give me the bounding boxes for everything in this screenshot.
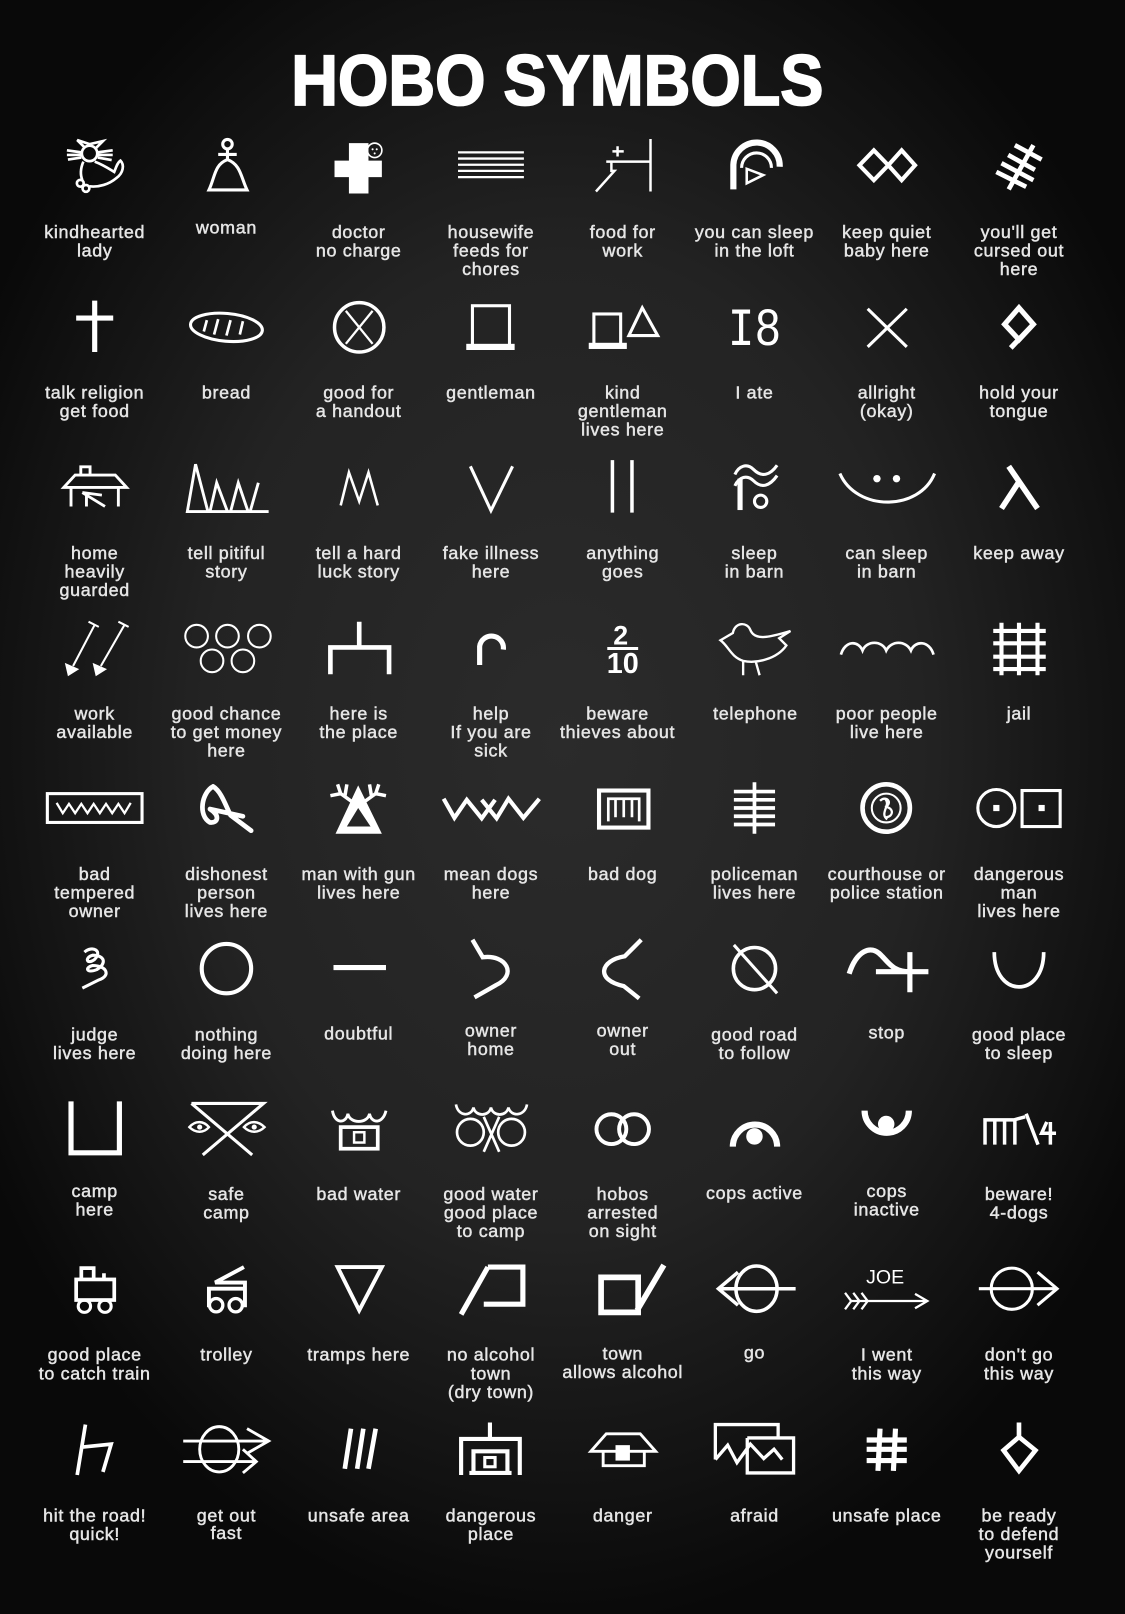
- label: If you are: [450, 722, 532, 742]
- icon: circle with arrows: [183, 1427, 269, 1473]
- label: available: [56, 722, 133, 742]
- label: I went: [861, 1345, 913, 1365]
- icon: cat: [67, 140, 123, 192]
- label: bread: [202, 382, 251, 402]
- label: fake illness: [443, 543, 539, 563]
- icon: shovels: [65, 622, 129, 676]
- label: yourself: [985, 1542, 1053, 1562]
- label: here: [207, 741, 246, 761]
- symbol: bad dog: [588, 791, 657, 884]
- icon: crossed lines with eyes: [189, 1103, 265, 1155]
- symbol: cursed out here: [974, 145, 1064, 279]
- icon: loaf: [189, 310, 264, 344]
- label: woman: [195, 218, 257, 238]
- symbol: poor people live here: [836, 643, 938, 742]
- symbol: no alcohol town dry town: [447, 1267, 535, 1402]
- label: unsafe place: [832, 1505, 941, 1525]
- icon: jagged line: [444, 799, 539, 818]
- label: owner: [597, 1021, 649, 1041]
- icon: train: [76, 1268, 114, 1312]
- symbol: owner home: [465, 940, 517, 1059]
- label: allows alcohol: [562, 1362, 683, 1382]
- label: camp: [71, 1181, 118, 1201]
- label: feeds for: [453, 240, 529, 260]
- label: bad dog: [588, 864, 657, 884]
- label: dangerous: [446, 1505, 536, 1525]
- label: good for: [323, 382, 394, 402]
- symbol: kind gentleman lives here: [578, 308, 668, 439]
- symbol: camp here: [71, 1101, 119, 1220]
- symbol: talk religion get food: [45, 301, 144, 421]
- label: lives here: [53, 1043, 136, 1063]
- symbol: dangerous man lives here: [974, 790, 1064, 921]
- label: this way: [984, 1363, 1054, 1383]
- icon: two lines: [612, 460, 632, 513]
- label: cursed out: [974, 240, 1064, 260]
- label: to defend: [979, 1524, 1059, 1544]
- icon: meander in box: [599, 791, 648, 828]
- label: don't go: [985, 1345, 1053, 1365]
- label: dishonest: [185, 864, 268, 884]
- label: a handout: [316, 401, 402, 421]
- label: good road: [711, 1025, 798, 1045]
- label: keep quiet: [842, 222, 931, 242]
- label: owner: [465, 1021, 517, 1041]
- label: anything: [586, 543, 659, 563]
- symbol: owner out: [597, 940, 649, 1059]
- label: sick: [474, 741, 508, 761]
- label: person: [197, 883, 256, 903]
- label: food for: [590, 222, 656, 242]
- label: out: [609, 1039, 636, 1059]
- icon: cross and circle: [335, 143, 382, 194]
- label: beware: [586, 704, 649, 724]
- icon: hat and triangle: [589, 308, 658, 349]
- label: you'll get: [981, 222, 1057, 242]
- label: in barn: [725, 561, 784, 581]
- symbol: doctor no charge: [316, 143, 402, 260]
- icon: pole with bars: [734, 782, 775, 834]
- icon: hash: [867, 1429, 907, 1471]
- label: doing here: [181, 1043, 272, 1063]
- label: to camp: [457, 1221, 525, 1241]
- label: in barn: [857, 561, 916, 581]
- symbol: beware 4-dogs: [985, 1114, 1056, 1223]
- label: stop: [868, 1023, 905, 1043]
- label: good place: [48, 1345, 142, 1365]
- label: man: [1001, 883, 1037, 903]
- label: hit the road!: [43, 1505, 146, 1525]
- label: tongue: [990, 401, 1048, 421]
- icon: crown and box: [332, 1111, 386, 1149]
- symbol: good place to catch train: [39, 1268, 151, 1383]
- symbol: hobos arrested on sight: [587, 1114, 658, 1241]
- label: camp: [203, 1203, 250, 1223]
- icon: slashed circle: [733, 945, 777, 993]
- label: luck story: [318, 561, 400, 581]
- label: lives here: [713, 883, 796, 903]
- symbol: be ready to defend yourself: [979, 1423, 1059, 1562]
- icon: diamond with tail: [1005, 308, 1033, 348]
- icon: arches with triangle: [733, 143, 780, 189]
- label: talk religion: [45, 382, 144, 402]
- symbol: bad water: [316, 1111, 401, 1204]
- symbol: trolley: [200, 1267, 253, 1365]
- label: lives here: [977, 901, 1061, 921]
- symbol: here is the place: [319, 622, 398, 742]
- label: you can sleep: [695, 222, 814, 242]
- label: 4-dogs: [990, 1203, 1048, 1223]
- label: work: [601, 240, 643, 260]
- symbol: anything goes: [586, 460, 659, 581]
- symbol: I ate: [728, 301, 781, 402]
- label: sleep: [731, 543, 778, 563]
- label: here: [472, 561, 510, 581]
- label: help: [473, 704, 509, 724]
- label: allright: [858, 382, 916, 402]
- symbol: stop: [849, 950, 928, 1043]
- icon: U square: [71, 1101, 119, 1153]
- label: cops active: [706, 1183, 803, 1203]
- label: owner: [69, 901, 121, 921]
- label: nothing: [195, 1025, 258, 1045]
- label: arrested: [587, 1203, 658, 1223]
- symbol: don't go this way: [979, 1268, 1057, 1383]
- symbol: work available: [56, 622, 133, 742]
- label: go: [744, 1343, 765, 1363]
- symbol: safe camp: [189, 1103, 265, 1223]
- label: kind: [605, 382, 640, 402]
- symbol: woman: [195, 139, 257, 238]
- label: (dry town): [448, 1382, 534, 1402]
- label: jail: [1006, 704, 1031, 724]
- icon: zigzag in box: [47, 794, 142, 822]
- label: to follow: [719, 1043, 790, 1063]
- symbol: unsafe place: [832, 1429, 941, 1525]
- label: be ready: [981, 1505, 1056, 1525]
- label: doubtful: [324, 1024, 393, 1044]
- symbol: mean dogs here: [444, 799, 539, 903]
- symbol: kindhearted lady: [44, 140, 145, 260]
- label: courthouse or: [828, 864, 946, 884]
- icon: slanted ladder: [996, 145, 1042, 189]
- icon: row of triangles: [186, 464, 269, 512]
- icon: square and slash: [601, 1265, 664, 1312]
- symbol: courthouse or police station: [828, 784, 946, 903]
- symbol: jail: [993, 623, 1046, 724]
- label: in the loft: [714, 240, 794, 260]
- icon: post and legs: [330, 622, 389, 674]
- icon: curve left: [604, 940, 641, 998]
- symbol: judge lives here: [53, 949, 136, 1063]
- label: good water: [443, 1184, 539, 1204]
- symbol: fake illness here: [443, 466, 539, 581]
- symbol: tell pitiful story: [186, 464, 269, 581]
- label: live here: [850, 722, 924, 742]
- label: to get money: [171, 722, 282, 742]
- icon: dash: [333, 965, 386, 970]
- icon: circle and square: [978, 790, 1060, 827]
- label: no charge: [316, 240, 402, 260]
- label: policeman: [711, 864, 798, 884]
- label: here is: [330, 704, 388, 724]
- label: quick!: [69, 1524, 120, 1544]
- icon: U curve: [994, 952, 1044, 987]
- symbol: policeman lives here: [711, 782, 798, 903]
- label: I ate: [735, 382, 774, 402]
- symbol: gentleman: [446, 306, 536, 402]
- icon: hook: [480, 636, 503, 665]
- label: keep away: [973, 543, 1065, 563]
- symbol: good road to follow: [711, 945, 798, 1063]
- icon: bowl and dot: [865, 1111, 909, 1133]
- icon: waves and circle: [735, 465, 777, 510]
- label: tell pitiful: [188, 543, 265, 563]
- symbol: good water good place to camp: [443, 1104, 539, 1241]
- symbol: go: [718, 1266, 796, 1363]
- label: baby here: [844, 240, 930, 260]
- icon: two over ten: 2: [613, 620, 628, 650]
- symbol: keep quiet baby here: [842, 150, 931, 260]
- icon: X: [868, 309, 907, 347]
- label: cops: [866, 1181, 907, 1201]
- label: good chance: [172, 704, 281, 724]
- label: dangerous: [974, 864, 1064, 884]
- label: here: [1000, 259, 1038, 279]
- label: beware!: [985, 1184, 1053, 1204]
- symbol: man with gun lives here: [301, 784, 416, 903]
- label: here: [75, 1200, 114, 1220]
- label: thieves about: [560, 722, 675, 742]
- symbol: bread: [189, 310, 264, 402]
- label: gentleman: [578, 401, 668, 421]
- label: work: [73, 704, 115, 724]
- icon: table and post: [596, 139, 651, 191]
- icon: squiggle: [82, 949, 106, 988]
- label: the place: [319, 722, 398, 742]
- icon: wavy line: [841, 643, 934, 655]
- label: trolley: [200, 1345, 253, 1365]
- label: lady: [77, 240, 112, 260]
- label: kindhearted: [44, 222, 145, 242]
- symbol: housewife feeds for chores: [448, 152, 534, 279]
- label: doctor: [332, 222, 386, 242]
- icon: I8: I8: [728, 301, 781, 362]
- label: gentleman: [446, 382, 536, 402]
- label: fast: [211, 1523, 242, 1543]
- label: safe: [208, 1184, 245, 1204]
- symbol: doubtful: [324, 968, 393, 1044]
- icon: smile: [840, 474, 935, 502]
- symbol: you can sleep in the loft: [695, 143, 814, 260]
- label: man with gun: [301, 864, 416, 884]
- label: home: [467, 1039, 515, 1059]
- symbol: good place to sleep: [972, 952, 1066, 1063]
- symbol: unsafe area: [308, 1429, 410, 1525]
- label: town: [471, 1363, 511, 1383]
- icon: lambda: [1001, 466, 1038, 509]
- label: hobos: [597, 1184, 649, 1204]
- label: bad: [79, 864, 111, 884]
- label: judge: [70, 1025, 118, 1045]
- icon: small house: [591, 1434, 656, 1466]
- icon: slash and square: [461, 1267, 523, 1314]
- icon: top hat: [466, 306, 515, 350]
- icon: house with inner box: [461, 1423, 520, 1475]
- label: good place: [444, 1203, 538, 1223]
- label: get food: [60, 401, 130, 421]
- symbol: help if you are sick: [450, 636, 532, 761]
- icon: M: [341, 472, 378, 505]
- icon: grid: [993, 623, 1046, 675]
- icon: woman: [209, 139, 247, 190]
- label: to sleep: [985, 1043, 1053, 1063]
- icon: inverted triangle: [338, 1267, 382, 1310]
- label: telephone: [713, 704, 798, 724]
- icon: three slashes: [345, 1429, 376, 1469]
- icon: arch and dot: [733, 1125, 777, 1147]
- symbol: bad tempered owner: [47, 794, 142, 921]
- label: here: [472, 883, 510, 903]
- label: to catch train: [39, 1363, 151, 1383]
- label: town: [602, 1344, 643, 1364]
- icon: overlapping boxes: [715, 1425, 794, 1473]
- label: housewife: [448, 222, 534, 242]
- icon: V: [470, 466, 513, 511]
- icon: five lines: [458, 152, 524, 177]
- label: tell a hard: [316, 543, 402, 563]
- label: lives here: [581, 419, 664, 439]
- icon: five circles: [185, 625, 271, 672]
- symbol: dangerous place: [446, 1423, 536, 1544]
- icon: two over ten: 10: [607, 648, 639, 680]
- symbol: hit the road quick: [43, 1425, 146, 1544]
- label: inactive: [854, 1200, 920, 1220]
- symbol: cops active: [706, 1125, 803, 1203]
- label: no alcohol: [447, 1345, 535, 1365]
- label: lives here: [317, 883, 400, 903]
- icon: house: [64, 467, 127, 506]
- symbol: I went this way: [845, 1267, 927, 1383]
- label: hold your: [979, 382, 1059, 402]
- symbol: cops inactive: [854, 1111, 920, 1220]
- label: tempered: [54, 883, 135, 903]
- label: goes: [602, 561, 643, 581]
- icon: waves and circles: [456, 1104, 527, 1152]
- icon: two diamonds: [859, 150, 915, 180]
- symbol: keep away: [973, 466, 1065, 563]
- label: police station: [830, 883, 944, 903]
- icon: comb and four: [985, 1114, 1056, 1145]
- symbol: tell a hard luck story: [316, 472, 402, 581]
- label: afraid: [730, 1505, 779, 1525]
- title: HOBO SYMBOLS: [291, 42, 823, 121]
- icon: arch and plus: [849, 950, 928, 992]
- label: can sleep: [845, 543, 928, 563]
- symbol: dishonest person lives here: [185, 786, 268, 921]
- icon: crossed circle: [335, 303, 384, 352]
- label: (okay): [860, 401, 914, 421]
- label: unsafe area: [308, 1505, 410, 1525]
- symbol: beware thieves about: [560, 620, 675, 742]
- label: story: [205, 561, 248, 581]
- icon: diamond on post: [1004, 1423, 1035, 1471]
- icon: cross: [76, 301, 113, 352]
- icon: curve right: [472, 940, 508, 997]
- symbol: food for work: [590, 139, 656, 260]
- symbol: danger: [591, 1434, 656, 1525]
- label: bad water: [316, 1184, 401, 1204]
- symbol: can sleep in barn: [840, 474, 935, 581]
- icon: right arrow with circle: [979, 1268, 1057, 1309]
- symbol: nothing doing here: [181, 944, 272, 1063]
- label: poor people: [836, 704, 938, 724]
- label: home: [71, 543, 118, 563]
- label: chores: [462, 259, 520, 279]
- label: on sight: [589, 1221, 657, 1241]
- label: good place: [972, 1025, 1066, 1045]
- icon: bird: [720, 624, 790, 675]
- symbol: home heavily guarded: [60, 467, 130, 600]
- icon: circle: [202, 944, 251, 993]
- symbol: good for a handout: [316, 303, 402, 421]
- symbol: sleep in barn: [725, 465, 784, 581]
- label: this way: [852, 1363, 922, 1383]
- symbol: good chance to get money here: [171, 625, 282, 761]
- icon: Q shape: [202, 786, 251, 831]
- label: tramps here: [307, 1345, 410, 1365]
- symbol: hold your tongue: [979, 308, 1059, 421]
- symbol: town allows alcohol: [562, 1265, 683, 1382]
- label: heavily: [65, 561, 125, 581]
- symbol: telephone: [713, 624, 798, 724]
- label: place: [468, 1524, 514, 1544]
- icon: circle with squiggle: [863, 784, 910, 832]
- symbol: tramps here: [307, 1267, 410, 1365]
- symbol: get out fast: [183, 1427, 269, 1543]
- label: guarded: [60, 580, 130, 600]
- label: mean dogs: [444, 864, 538, 884]
- icon: two over ten: [607, 620, 639, 680]
- label: get out: [197, 1505, 256, 1525]
- icon: slanted h: [77, 1425, 111, 1475]
- label: danger: [593, 1505, 653, 1525]
- icon: tepee with branches: [330, 784, 386, 834]
- icon: JOE arrow: JOE: [866, 1267, 904, 1289]
- symbol: afraid: [715, 1425, 794, 1525]
- icon: trolley: [209, 1267, 245, 1312]
- symbol: allright okay: [858, 309, 916, 421]
- icon: interlocking circles: [596, 1114, 649, 1144]
- label: lives here: [185, 901, 268, 921]
- icon: left arrow with circle: [718, 1266, 796, 1311]
